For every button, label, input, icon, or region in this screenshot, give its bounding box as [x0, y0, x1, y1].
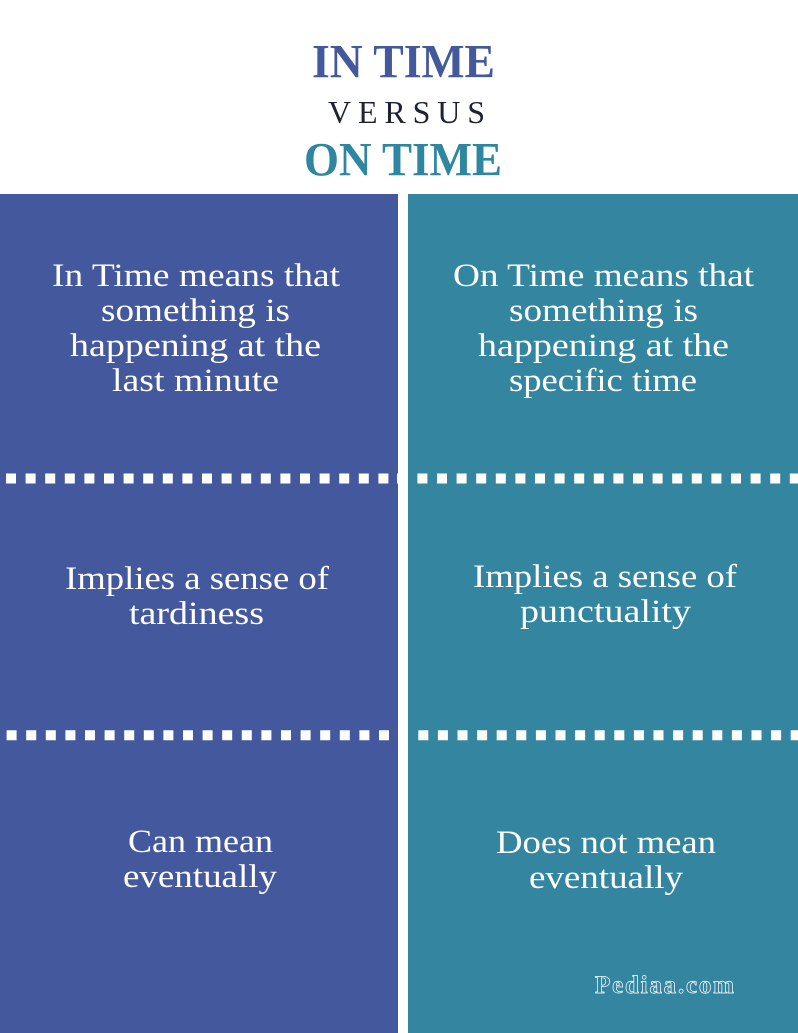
title: On Time: ON TIME — [304, 134, 502, 186]
panel: On Time column — [408, 194, 798, 1033]
text: On Time implication: punctuality — [520, 594, 692, 630]
text: On Time definition: something is — [509, 293, 698, 329]
text: In Time definition: In Time means that — [52, 258, 340, 294]
text: In Time meaning: eventually — [123, 859, 278, 895]
text: In Time meaning: Can mean — [128, 824, 273, 860]
text: On Time definition: On Time means that — [453, 258, 754, 294]
text: On Time meaning: eventually — [529, 860, 684, 896]
text: In Time definition — [52, 258, 340, 399]
logo: Pediaa.com: Pediaa.com — [595, 972, 734, 999]
dotted divider: second row — [7, 730, 798, 740]
text: In Time definition: something is — [101, 293, 290, 329]
text: On Time definition: happening at the — [478, 328, 729, 364]
text: In Time implication — [65, 561, 329, 632]
text: In Time implication: Implies a sense of — [65, 561, 329, 597]
text: In Time definition: happening at the — [70, 328, 321, 364]
panel: In Time column — [0, 194, 398, 1033]
text: In Time definition: last minute — [112, 363, 279, 399]
text: In Time implication: tardiness — [129, 596, 264, 632]
text: On Time implication: Implies a sense of — [473, 559, 737, 595]
text: On Time implication — [473, 559, 737, 630]
title: versus: VERSUS — [328, 94, 485, 130]
text: On Time definition: specific time — [509, 363, 697, 399]
title: In Time: IN TIME — [312, 36, 495, 88]
dotted divider: first row — [6, 474, 798, 484]
text: On Time definition — [453, 258, 754, 399]
text: On Time meaning: Does not mean — [496, 825, 716, 861]
text: On Time meaning — [496, 825, 716, 896]
text: In Time meaning — [123, 824, 278, 895]
title block — [304, 36, 502, 186]
